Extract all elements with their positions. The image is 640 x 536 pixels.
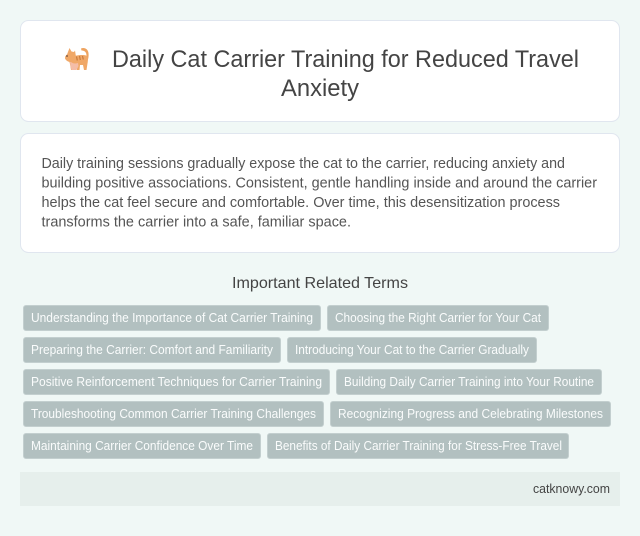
- chip: [24, 306, 320, 330]
- description text: helps the cat feel secure and comfortable. Over time, this desensitization process: [42, 194, 560, 211]
- description text: building positive associations. Consistent, gentle handling inside and around the carrier: [42, 174, 597, 192]
- chip: [24, 402, 324, 426]
- heading: related terms: Important Related Terms: [232, 275, 408, 292]
- chip: [268, 434, 568, 458]
- chip: [336, 370, 602, 394]
- chip: Introducing Your Cat to the Carrier Gradually: [295, 343, 530, 357]
- panel: description: [20, 134, 620, 252]
- chip: Benefits of Daily Carrier Training for Stress-Free Travel: [275, 439, 562, 453]
- chip: Recognizing Progress and Celebrating Milestones: [338, 407, 603, 421]
- title: [112, 46, 579, 102]
- icon: cat: [65, 48, 89, 70]
- chip: [24, 434, 260, 458]
- description text: [42, 155, 597, 230]
- chip: Troubleshooting Common Carrier Training Challenges: [31, 407, 316, 421]
- chip: [24, 338, 280, 362]
- description text: transforms the carrier into a safe, familiar space.: [42, 214, 351, 230]
- description text: Daily training sessions gradually expose the cat to the carrier, reducing anxiety and: [42, 155, 565, 172]
- title: Daily Cat Carrier Training for Reduced Travel: [112, 46, 579, 73]
- panel: title card: [20, 20, 620, 122]
- chip: [330, 402, 610, 426]
- footer site name: catknowy.com: [533, 482, 610, 496]
- title: Anxiety: [281, 75, 359, 102]
- chip: Maintaining Carrier Confidence Over Time: [31, 439, 253, 453]
- related terms chips: [24, 306, 610, 458]
- chip: Understanding the Importance of Cat Carrier Training: [31, 311, 313, 325]
- chip: [24, 370, 330, 394]
- chip: Choosing the Right Carrier for Your Cat: [335, 311, 541, 325]
- chip: Positive Reinforcement Techniques for Carrier Training: [31, 375, 322, 389]
- chip: Preparing the Carrier: Comfort and Familiarity: [31, 343, 274, 357]
- chip: Building Daily Carrier Training into Your Routine: [344, 375, 594, 389]
- chip: [328, 306, 548, 330]
- chip: [288, 338, 536, 362]
- footer: [20, 472, 620, 506]
